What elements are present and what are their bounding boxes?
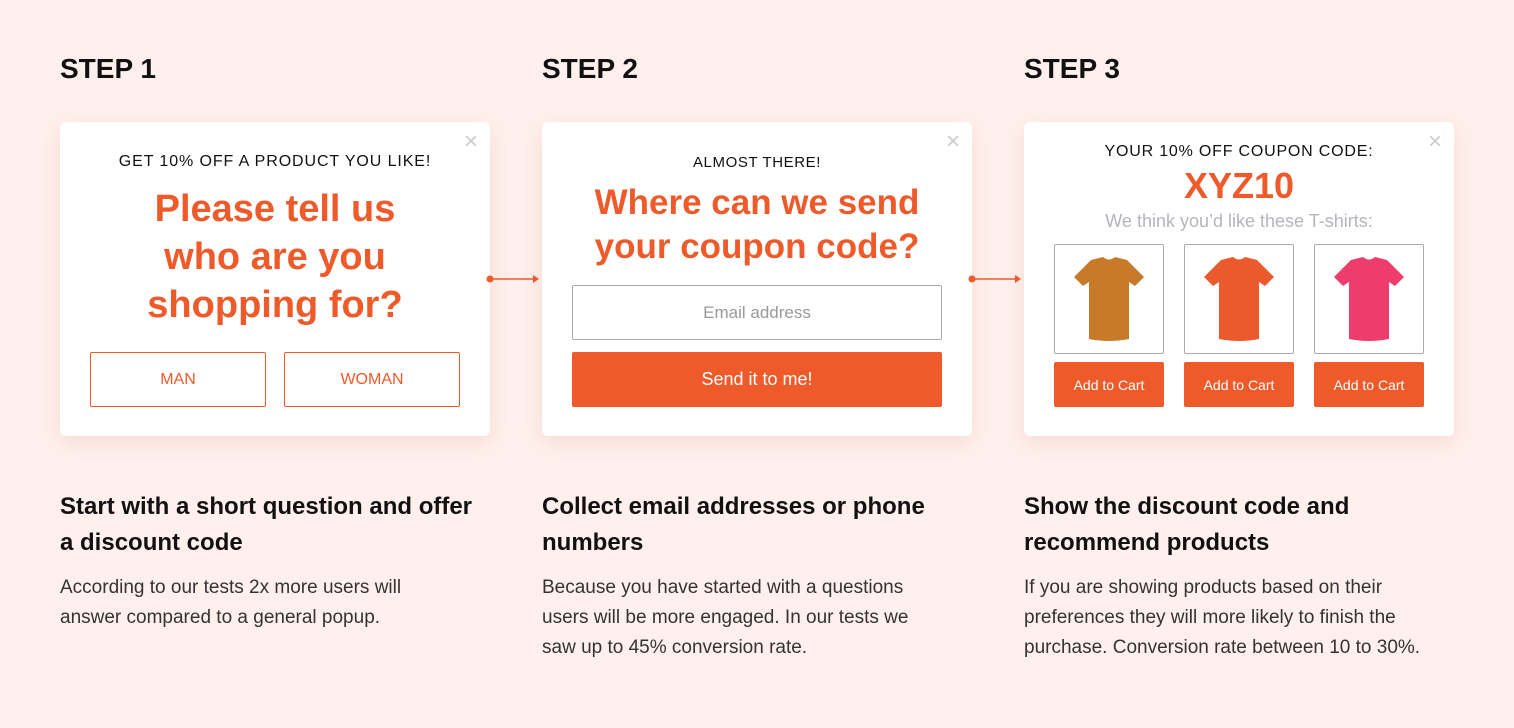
text block: step 2 body: Because you have started with a questions users will be more engaged. In our tests we saw up to 45% conversion rate. — [542, 577, 908, 658]
panel: step 3 popup: × — [1428, 128, 1442, 155]
product 1 — [1054, 244, 1164, 354]
heading: step 2: STEP 2 — [542, 53, 638, 84]
add to cart buttons: Add to Cart — [1074, 376, 1144, 392]
heading: step 3: STEP 3 — [1024, 53, 1120, 84]
popup title: GET 10% OFF A PRODUCT YOU LIKE! — [119, 153, 431, 170]
button: send: Send it to me! — [701, 369, 813, 389]
text block: step 2 heading: Collect email addresses or phone numbers — [542, 493, 925, 556]
popup headline: who are you — [164, 236, 386, 278]
product 3 — [1314, 244, 1424, 354]
popup headline — [594, 183, 919, 266]
popup headline: Where can we send — [595, 183, 919, 222]
text block: step 3 body: If you are showing products based on their preferences they will more likely to finish the purchase. Conversion rate between 10 to 30%. — [1024, 577, 1420, 658]
email input — [572, 285, 942, 340]
popup headline: shopping for? — [147, 284, 403, 326]
coupon code: XYZ10 — [1184, 165, 1294, 206]
email input: Email address — [703, 302, 811, 322]
button: woman: WOMAN — [340, 370, 404, 388]
product 2 — [1184, 244, 1294, 354]
heading: step 1: STEP 1 — [60, 53, 156, 84]
subtitle: We think you’d like these T-shirts: — [1105, 211, 1373, 231]
add to cart buttons: Add to Cart — [1204, 376, 1274, 392]
button: send — [572, 352, 942, 407]
button: man — [90, 352, 266, 407]
text block: step 1 heading: Start with a short question and offer a discount code — [60, 493, 472, 556]
text block: step 3 heading: Show the discount code and recommend products — [1024, 493, 1349, 556]
popup headline: your coupon code? — [595, 227, 919, 266]
popup title: YOUR 10% OFF COUPON CODE: — [1105, 143, 1373, 160]
panel: step 1 popup: × — [464, 128, 478, 155]
text block: step 1 body: According to our tests 2x more users will answer compared to a general popup. — [60, 577, 401, 628]
arrow: step 1 to 2 — [486, 275, 539, 283]
panel: step 3 popup — [1024, 122, 1454, 436]
popup headline: Please tell us — [155, 188, 395, 230]
add to cart buttons: Add to Cart — [1334, 376, 1404, 392]
popup title: ALMOST THERE! — [693, 154, 821, 171]
panel: step 2 popup — [542, 122, 972, 436]
panel: step 2 popup: × — [946, 128, 960, 155]
arrow: step 2 to 3 — [968, 275, 1021, 283]
button: man: MAN — [160, 370, 196, 388]
panel: step 1 popup — [60, 122, 490, 436]
add to cart buttons — [1054, 362, 1424, 407]
popup headline — [147, 188, 403, 326]
button: woman — [284, 352, 460, 407]
